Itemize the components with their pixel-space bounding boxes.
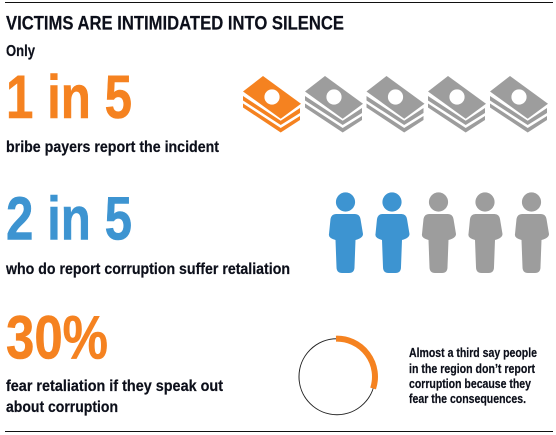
icon: gray person 3 — [422, 192, 456, 273]
caption: fear retaliation: about corruption — [6, 399, 118, 416]
icon: gray banknotes 2 — [305, 76, 363, 132]
stat: 30%: 30% — [6, 304, 108, 372]
caption: bribe payers: bribe payers report the incident — [6, 139, 220, 156]
side note — [409, 346, 537, 406]
icon: gray banknotes 5 — [490, 76, 548, 132]
stat: 1 in 5: 1 in 5 — [6, 63, 132, 131]
caption: fear retaliation: fear retaliation if they speak out — [6, 378, 224, 395]
icons: people, two of five blue — [329, 192, 549, 273]
icon: gray banknotes 3 — [366, 76, 424, 132]
icon: orange banknotes — [243, 76, 301, 132]
title: VICTIMS ARE INTIMIDATED INTO SILENCE — [6, 12, 344, 34]
side note: fear the consequences. — [409, 392, 526, 406]
stat: 2 in 5: 2 in 5 — [6, 184, 132, 252]
icon: gray person 5 — [515, 192, 549, 273]
bottom rule — [5, 431, 553, 432]
top rule — [5, 2, 553, 3]
caption: fear retaliation — [6, 378, 224, 416]
icon: gray banknotes 4 — [428, 76, 486, 132]
icon: blue person 2 — [375, 192, 410, 273]
icon: blue person 1 — [329, 192, 363, 273]
donut chart: 30 percent — [299, 339, 375, 415]
icons: banknote stacks, one of five orange — [243, 76, 548, 132]
side note: in the region don’t report — [409, 362, 536, 376]
side note: corruption because they — [409, 377, 531, 391]
caption: retaliation: who do report corruption suffer retaliation — [5, 261, 290, 278]
icon: gray person 4 — [468, 192, 502, 273]
intro text: Only — [6, 43, 35, 60]
